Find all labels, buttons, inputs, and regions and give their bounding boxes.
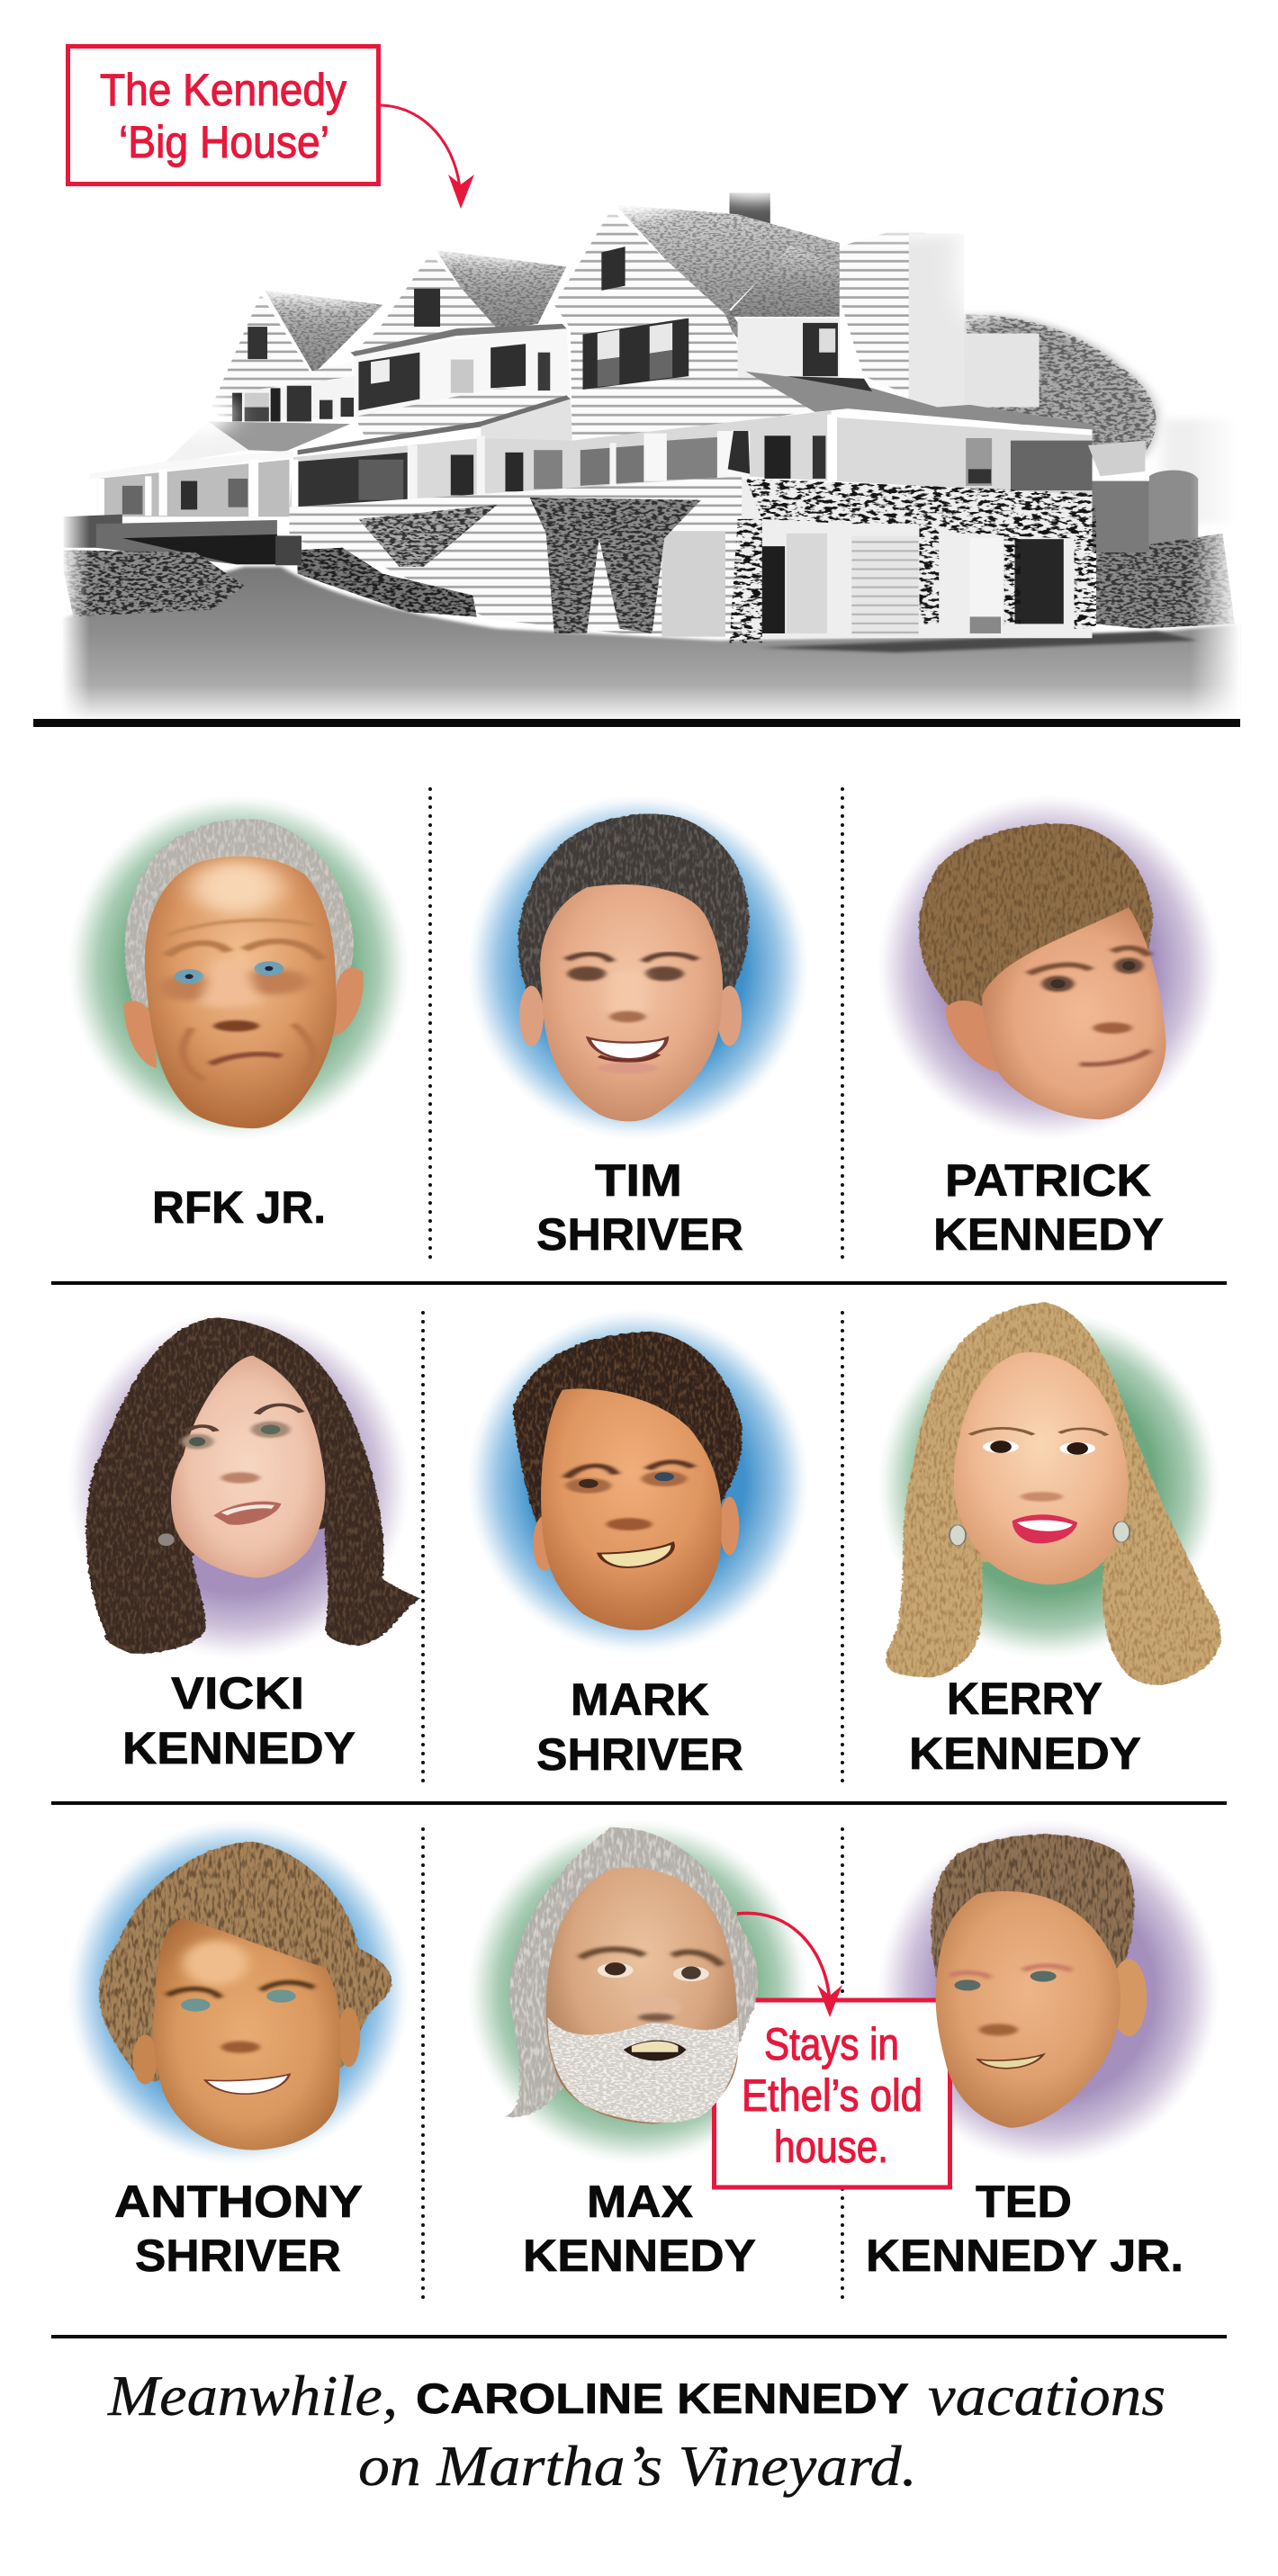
label: Tim Shriver: SHRIVER (536, 1209, 743, 1260)
face: Kerry Kennedy (886, 1302, 1221, 1685)
face: Vicki Kennedy (86, 1317, 419, 1654)
label: Max Kennedy (523, 2177, 756, 2281)
face: Anthony Shriver (99, 1842, 392, 2150)
middle gable window (414, 289, 440, 327)
halos (68, 794, 1220, 2165)
label: Vicki Kennedy: KENNEDY (122, 1723, 356, 1773)
shrubs (64, 515, 477, 616)
face: Ted Kennedy Jr. (931, 1835, 1147, 2128)
left windows (232, 376, 355, 421)
label: Max Kennedy: KENNEDY (523, 2230, 756, 2281)
caption: CAROLINE KENNEDY (416, 2374, 909, 2422)
label: RFK Jr.: RFK JR. (152, 1182, 326, 1233)
callout: Stays in Ethel's old house: Stays in (764, 2019, 899, 2069)
middle bay (350, 324, 571, 419)
steps (275, 535, 302, 565)
big chimney (835, 229, 1040, 408)
label: Mark Shriver: MARK (571, 1674, 709, 1725)
label: Patrick Kennedy (933, 1155, 1164, 1260)
porch upper right (832, 410, 1149, 552)
second storey siding (355, 388, 572, 441)
middle gable roof (436, 250, 566, 331)
label: Mark Shriver: SHRIVER (536, 1729, 743, 1780)
main roof (616, 205, 840, 374)
face: Max Kennedy (505, 1827, 758, 2124)
lawn (61, 567, 1240, 718)
label: Kerry Kennedy: KENNEDY (909, 1728, 1141, 1779)
name labels (114, 1155, 1184, 2281)
callout: The Kennedy Big House: ‘Big House’ (119, 117, 329, 167)
label: Ted Kennedy Jr. (866, 2177, 1184, 2281)
label: Kerry Kennedy (909, 1674, 1141, 1779)
gable upper window (601, 247, 626, 291)
face: Mark Shriver (514, 1332, 742, 1630)
caption: on Martha’s Vineyard. (358, 2434, 917, 2498)
left gable window (248, 327, 267, 359)
label: Kerry Kennedy: KERRY (947, 1674, 1102, 1724)
shadow on lawn (758, 631, 1198, 652)
caption: Meanwhile, (107, 2364, 398, 2428)
middle gable wall (352, 254, 497, 354)
label: Mark Shriver (536, 1674, 743, 1780)
roof fade (167, 175, 999, 435)
thick rule (33, 719, 1240, 727)
small chimney (730, 193, 770, 253)
caption: vacations (928, 2364, 1166, 2428)
callout: Stays in Ethel's old house (715, 2000, 950, 2187)
label: Ted Kennedy Jr.: TED (976, 2177, 1072, 2227)
callout: Stays in Ethel's old house: house. (774, 2122, 888, 2172)
left porch (98, 460, 298, 516)
callout: Stays in Ethel's old house: Ethel’s old (742, 2070, 922, 2121)
label: Vicki Kennedy: VICKI (171, 1668, 304, 1719)
label: Anthony Shriver (114, 2177, 363, 2281)
dormer (725, 246, 840, 378)
callout: The Kennedy Big House: The Kennedy (100, 65, 346, 115)
caption (107, 2364, 1166, 2498)
face: RFK Jr. (124, 819, 364, 1128)
main gable windows (583, 319, 688, 390)
label: Max Kennedy: MAX (587, 2177, 693, 2227)
label: Anthony Shriver: ANTHONY (114, 2177, 363, 2227)
retaining wall (289, 476, 746, 638)
porch wall (289, 399, 837, 507)
left porch roof (90, 421, 350, 479)
callout: The Kennedy Big House (68, 47, 378, 184)
face: Tim Shriver (518, 814, 749, 1121)
lower garage level (662, 479, 1093, 638)
face: Patrick Kennedy (919, 823, 1166, 1119)
label: Vicki Kennedy (122, 1668, 356, 1773)
ivy on wall (358, 498, 701, 633)
right porch roof sliver (298, 395, 571, 454)
label: Tim Shriver (536, 1155, 743, 1260)
edge fades (0, 405, 1278, 724)
arrow to Stays callout (737, 1913, 842, 2017)
arrow to house (379, 105, 474, 209)
left roof (265, 291, 383, 374)
label: Anthony Shriver: SHRIVER (135, 2230, 341, 2281)
gate (1149, 471, 1198, 552)
ivy on garage (730, 479, 1096, 643)
label: Tim Shriver: TIM (595, 1155, 682, 1206)
lower right roof (746, 372, 1096, 431)
left gable wall (211, 294, 352, 428)
main gable wall (554, 210, 815, 450)
background trees (966, 314, 1156, 457)
right shrubs (1096, 534, 1235, 629)
label: Patrick Kennedy: PATRICK (945, 1155, 1151, 1206)
label: Patrick Kennedy: KENNEDY (933, 1209, 1164, 1260)
label: Ted Kennedy Jr.: KENNEDY JR. (866, 2230, 1184, 2281)
house photo (0, 175, 1278, 724)
grid dividers (51, 789, 1227, 2337)
right fence (1161, 419, 1235, 524)
